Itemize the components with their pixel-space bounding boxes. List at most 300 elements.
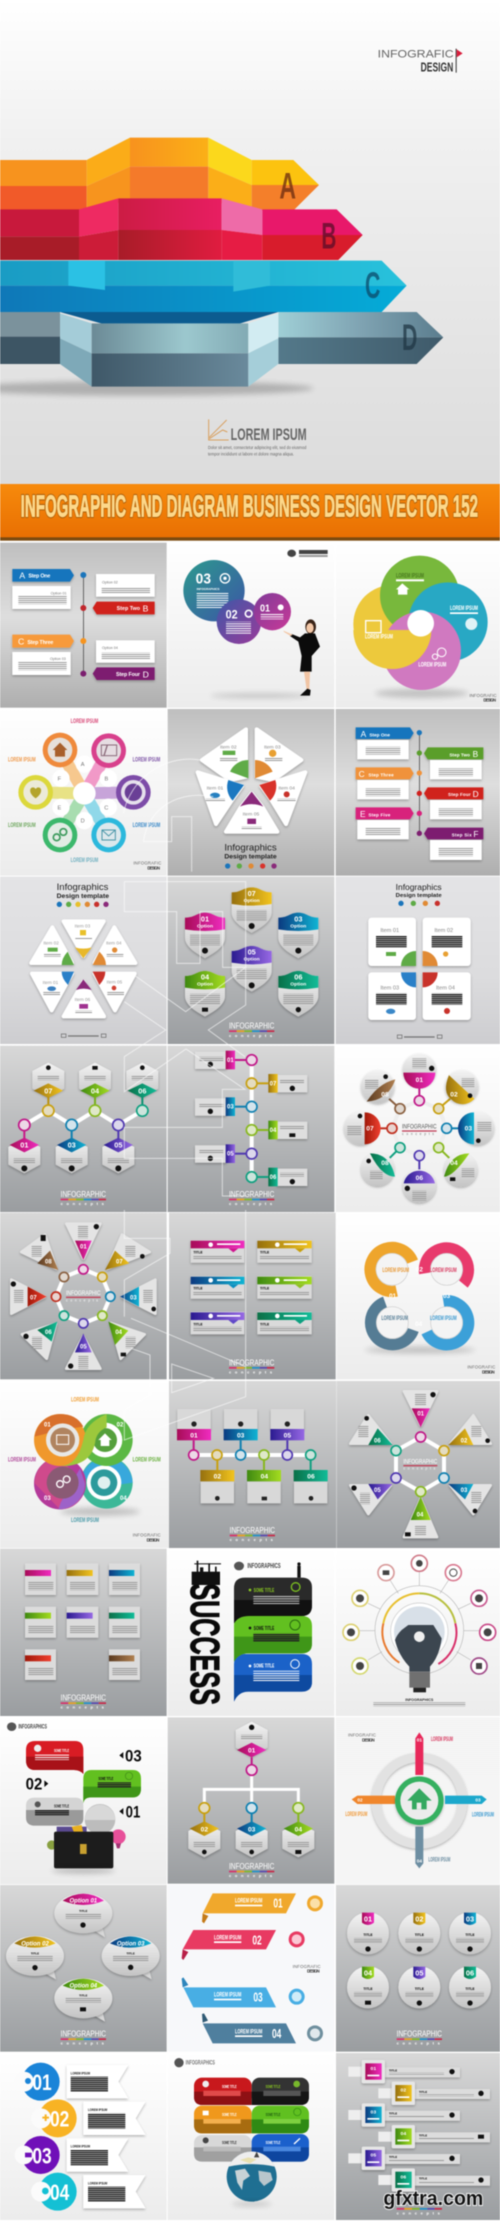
shield 07: Option [244, 898, 260, 904]
grey bubble [26, 1798, 83, 1826]
panel: org chart hexagons [168, 1717, 334, 1884]
infographic concepts mark [230, 1525, 276, 1542]
infographic concepts mark [229, 1357, 276, 1374]
blue bubble [252, 2134, 309, 2162]
top arrow [415, 1732, 423, 1775]
labels: LOREM IPSUM [71, 1517, 99, 1524]
item 04: Item 04 [278, 786, 295, 792]
shield 05: 05 [248, 948, 256, 957]
card 05 [67, 1607, 98, 1638]
left arrow [352, 1796, 395, 1804]
shield 07 [232, 887, 272, 933]
tab 03: 03 [227, 1105, 234, 1111]
circle 03 [34, 1457, 86, 1509]
infographic concepts mark: INFOGRAPHIC [61, 1693, 106, 1703]
bubble 03: Option 03 [117, 1941, 145, 1947]
bubble 03 [183, 560, 245, 621]
tip numbers: 04 [417, 1513, 424, 1519]
row 04: TITLE [419, 2133, 427, 2137]
circle 07 [344, 1112, 397, 1145]
badge 05 [398, 1966, 440, 2008]
circle 04: 04 [450, 1160, 458, 1167]
panel: hero arrows [0, 0, 500, 484]
row 03: 03 [32, 2143, 52, 2168]
centre mark: INFOGRAPHIC [66, 1290, 101, 1297]
infographic concepts mark: concepts [61, 2041, 107, 2046]
row 03 [348, 2103, 460, 2127]
badge 03 [449, 1912, 491, 1954]
badge 02 [398, 1912, 440, 1954]
row 06: 06 [401, 2174, 406, 2180]
panel: six header cards [169, 1213, 336, 1379]
ribbon 01 [202, 1893, 323, 1923]
tab 06: 06 [270, 1175, 277, 1181]
shield 01: Option [197, 923, 213, 929]
shield 06: Option [290, 982, 306, 988]
bubble 04: Option 04 [70, 1984, 98, 1990]
arrow C: C [365, 264, 380, 306]
item 02 left [31, 927, 74, 965]
infographic concepts mark: INFOGRAPHIC [230, 1525, 275, 1535]
bubble 04: TITLE [79, 1994, 87, 1998]
panel: zigzag hexagons [0, 1046, 167, 1212]
colour dots [225, 863, 277, 869]
panel: success ribbons [168, 1549, 334, 1716]
bubble 01: Option 01 [70, 1899, 97, 1905]
nodes [391, 1432, 449, 1497]
card 01: TITLE [193, 1251, 203, 1255]
row 04: LOREM IPSUM [88, 2180, 108, 2185]
tip numbers: 01 [417, 1411, 425, 1417]
lorem ipsum caption: tempor incididunt ut labore et dolore magna aliqua. [208, 452, 294, 458]
bottom arrow [415, 1827, 423, 1868]
badge 04 [347, 1966, 389, 2008]
card 06: TITLE [260, 1322, 270, 1326]
tip labels: 04 [115, 1330, 123, 1336]
infographic concepts mark: INFOGRAPHIC [229, 1861, 274, 1871]
node 06 [126, 1063, 158, 1116]
item 02 left: Item 02 [43, 941, 59, 946]
arrow B [0, 198, 363, 260]
row 02 [31, 2099, 146, 2137]
logo: DESIGN [147, 865, 160, 870]
panel: six round badges [336, 1885, 500, 2052]
card 06 [257, 1312, 312, 1334]
tab 01: 01 [227, 1058, 234, 1064]
bubble 01 [54, 1893, 112, 1937]
item 03 [255, 729, 301, 780]
pink ring [424, 1248, 468, 1284]
step D [424, 787, 483, 819]
logo [133, 861, 161, 870]
heading [396, 882, 442, 899]
badge 01: TITLE [363, 1933, 373, 1937]
logo: INFOGRAFIC [293, 1964, 321, 1969]
person silhouette [297, 1562, 301, 1578]
letter dots [52, 755, 117, 829]
home hub [395, 1776, 444, 1825]
item 03 [368, 972, 416, 1020]
logo: INFOGRAPHICS [247, 1561, 281, 1570]
infographic concepts mark: INFOGRAPHIC [397, 2029, 442, 2039]
labels: LOREM IPSUM [71, 857, 99, 864]
shield 07: 07 [248, 889, 256, 898]
labels: LOREM IPSUM [133, 1457, 161, 1464]
row 02: 02 [50, 2107, 69, 2132]
shield 06 [278, 971, 318, 1017]
logo: INFOGRAFIC [348, 1733, 376, 1738]
item 03: Item 03 [264, 745, 281, 751]
colour dots [398, 901, 440, 906]
item 01: Item 01 [207, 786, 224, 792]
panel: six step timeline [336, 709, 500, 876]
blue ring [427, 1301, 469, 1345]
tip labels: 07 [116, 1259, 123, 1265]
circle 02: 02 [450, 1092, 458, 1099]
icon: gears [43, 818, 77, 852]
centre hole [407, 610, 434, 637]
step F: Step Six [452, 833, 472, 838]
black bubble: SOME TITLE [266, 2084, 280, 2089]
card 01 [177, 1409, 211, 1460]
circle 04: 04 [120, 1496, 127, 1502]
bubble 02 [217, 599, 261, 644]
ribbon 04 [202, 2013, 323, 2043]
bubble 01 [254, 593, 291, 630]
tip numbers: 05 [374, 1488, 381, 1494]
ribbon 03: LOREM IPSUM [214, 1992, 242, 1999]
ring numbers: 04 [415, 1321, 423, 1328]
item 02 [202, 729, 248, 780]
bubble 04 [54, 1978, 112, 2022]
tip labels: 06 [45, 1330, 52, 1336]
circle 06 [361, 1143, 405, 1186]
badge 06: TITLE [465, 1987, 475, 1991]
logo [133, 1533, 161, 1542]
badge 04: 04 [364, 1968, 373, 1977]
row 02 [378, 2082, 490, 2105]
infographic concepts mark: INFOGRAPHIC [229, 1021, 274, 1031]
logo [7, 1722, 47, 1731]
step F: F [473, 829, 478, 839]
icon: globe [116, 775, 151, 810]
ribbon 04: LOREM IPSUM [235, 2028, 263, 2035]
circle 02 [81, 1414, 133, 1466]
item 05 [226, 792, 277, 832]
card 01 [25, 1563, 56, 1595]
card 03 [224, 1409, 258, 1460]
bubble 03 [102, 1936, 160, 1979]
panel: S curve circles [0, 1381, 169, 1548]
icon: home [43, 733, 77, 767]
circle 01 [34, 1414, 107, 1466]
card 04: TITLE [260, 1287, 270, 1291]
row 05: TITLE [389, 2155, 397, 2159]
heading: Infographics [396, 882, 442, 892]
petal arms [36, 750, 133, 835]
ribbon 03: 03 [253, 1990, 263, 2004]
centre mark: INFOGRAPHIC [403, 1458, 437, 1465]
infographic concepts mark: INFOGRAPHIC [229, 1189, 274, 1199]
green bubble [252, 2106, 309, 2133]
lorem ipsum caption: LOREM IPSUM [231, 425, 307, 444]
item 01 left lower: Item 01 [43, 980, 59, 985]
concepts mark [397, 2208, 443, 2215]
ribbon 02: 02 [252, 1933, 262, 1947]
ground shadow [0, 381, 313, 396]
caption [373, 1698, 465, 1706]
steel ring [371, 1302, 413, 1345]
logo: INFOGRAPHICS [18, 1724, 47, 1730]
row 03: 03 [371, 2109, 376, 2115]
infographic concepts mark: concepts [229, 1369, 276, 1374]
inner circles [376, 1253, 463, 1339]
step F [424, 828, 483, 860]
panel: staggered timeline bars [336, 2053, 500, 2220]
panel: speech bubbles with bag [0, 1717, 167, 1884]
step B [424, 747, 483, 779]
logo: DESIGN [482, 1369, 495, 1374]
tip labels: 08 [45, 1259, 52, 1265]
number labels: 01 [126, 1802, 140, 1821]
infographic concepts mark: concepts [229, 1201, 276, 1206]
badge 01 [347, 1912, 389, 1954]
top hex [236, 1722, 268, 1775]
panel: hexagon triangles [0, 877, 167, 1044]
tab 07: 07 [270, 1081, 277, 1087]
card 05 [270, 1409, 304, 1460]
triangles [11, 1224, 155, 1369]
red bubble: SOME TITLE [54, 1748, 69, 1753]
logo: INFOGRAPHICS [186, 2060, 215, 2066]
step one: Step One [28, 574, 50, 580]
step two: Option 02 [102, 580, 118, 584]
caption: INFOGRAPHICS [405, 1698, 434, 1702]
item 03: Item 03 [380, 985, 399, 991]
item 01: Item 01 [380, 928, 399, 934]
step four [93, 640, 155, 680]
ring numbers [389, 1266, 451, 1328]
disc labels: LOREM IPSUM [396, 572, 424, 579]
icon: monitor [91, 733, 126, 768]
yellow disc [353, 585, 431, 663]
circle 08 [361, 1070, 405, 1114]
circle 01: 01 [44, 1423, 51, 1429]
top arrow: 01 [417, 1738, 422, 1743]
panel: pinwheel discs [336, 543, 500, 708]
logo [174, 2058, 215, 2067]
step three: C [18, 636, 24, 646]
infographic concepts mark: concepts [229, 1873, 276, 1878]
badge 03: TITLE [465, 1933, 475, 1937]
shield 03 [278, 913, 318, 958]
number labels: 03 [125, 1746, 142, 1765]
heading: Design template [57, 893, 110, 900]
shield 04 [185, 971, 225, 1017]
step B: Step Two [449, 753, 470, 758]
letters: A [81, 762, 85, 768]
circle 07: 07 [366, 1126, 374, 1133]
step three [12, 635, 74, 675]
row 01: 01 [32, 2070, 52, 2095]
top hex: 01 [248, 1748, 256, 1755]
heading: Design template [224, 854, 277, 861]
labels [8, 718, 161, 864]
row 02: 02 [401, 2088, 406, 2094]
hex 04 [282, 1803, 314, 1857]
row 02: TITLE [419, 2090, 427, 2094]
footer note [397, 1035, 442, 1038]
step C [356, 767, 414, 799]
heading [224, 842, 277, 861]
tip numbers: 06 [374, 1439, 381, 1445]
card 05: TITLE [193, 1322, 203, 1326]
outer ring [376, 1757, 463, 1844]
tip numbers [374, 1411, 468, 1519]
infographic concepts mark: INFOGRAPHIC [229, 1357, 274, 1367]
step D: D [473, 789, 479, 799]
footer note [61, 1034, 106, 1037]
step A: Step One [369, 732, 390, 737]
heading [57, 882, 110, 900]
card 02: TITLE [260, 1251, 270, 1255]
ribbon 01: LOREM IPSUM [235, 1898, 263, 1905]
hex 02 [188, 1803, 220, 1857]
infographic concepts mark: concepts [229, 1033, 276, 1038]
green disc [380, 556, 459, 635]
orange bubble [194, 2106, 252, 2133]
infographic concepts mark: concepts [230, 1537, 276, 1542]
green bubble: SOME TITLE [98, 1776, 113, 1781]
item 04 right: Item 04 [106, 941, 122, 946]
green bubble [83, 1770, 141, 1804]
step four: Step Four [116, 672, 140, 678]
card 04 [257, 1276, 312, 1299]
ring numbers: 03 [443, 1293, 451, 1300]
labels: LOREM IPSUM [8, 1457, 36, 1464]
card 01: 01 [190, 1433, 198, 1440]
infographic concepts mark [229, 1021, 276, 1038]
left arrow: 02 [357, 1798, 363, 1803]
circle 02 [434, 1070, 478, 1114]
step C: C [359, 769, 365, 779]
badge 04: TITLE [363, 1987, 373, 1991]
step four: D [143, 669, 149, 679]
circle 02: 02 [117, 1423, 124, 1429]
blue bubble: SOME TITLE [266, 2140, 280, 2145]
bubble 02 [6, 1936, 64, 1979]
hex 04: 04 [295, 1826, 302, 1833]
tip numbers: 03 [461, 1488, 468, 1494]
badge 05: TITLE [415, 1987, 425, 1991]
node 05 [102, 1119, 134, 1173]
circle 04 [81, 1457, 133, 1509]
card 02: 02 [214, 1473, 221, 1480]
ribbon 04: 04 [272, 2027, 281, 2041]
row 05: 05 [371, 2153, 376, 2159]
step four: Option 04 [102, 646, 118, 650]
ring numbers: 02 [416, 1266, 423, 1273]
panel: lightbulb hub [336, 1549, 500, 1716]
toolbag with helmet and balloon [47, 1804, 126, 1873]
node 06: 06 [138, 1086, 146, 1095]
infographic concepts mark [229, 1861, 276, 1878]
grey bubble: SOME TITLE [222, 2140, 237, 2145]
shield 03: Option [290, 923, 306, 929]
badge 01: 01 [364, 1914, 372, 1923]
badge 02: TITLE [415, 1933, 425, 1937]
right arrow [445, 1796, 487, 1804]
bubble 02: Option 02 [21, 1941, 49, 1947]
bubble 02: TITLE [31, 1952, 39, 1956]
row 06 [378, 2168, 490, 2192]
arrow A [0, 138, 319, 211]
ring labels: LOREM IPSUM [430, 1315, 457, 1322]
logo: infografic design [378, 49, 463, 75]
circle 03: 03 [44, 1496, 51, 1502]
colour arc [382, 1593, 456, 1664]
panel: option speech bubbles [0, 1885, 167, 2052]
node 03: 03 [68, 1141, 76, 1150]
labels: LOREM IPSUM [431, 1737, 453, 1743]
satellite icons [343, 1555, 496, 1674]
labels: LOREM IPSUM [428, 1858, 450, 1864]
card 06 [294, 1450, 328, 1503]
heading: Infographics [57, 882, 109, 892]
card 04 [247, 1450, 281, 1503]
centre mark [403, 1458, 438, 1471]
ring shadow [365, 1347, 475, 1353]
item 01 left lower [32, 972, 74, 1010]
letters: D [81, 819, 85, 825]
black bubble [252, 2078, 309, 2105]
circle 03: 03 [465, 1126, 472, 1133]
disc labels [365, 572, 478, 669]
connectors [377, 1087, 462, 1172]
coloured tips [368, 1408, 473, 1520]
node 07: 07 [44, 1086, 52, 1095]
panel: hexagon triangle ring [337, 1381, 500, 1548]
heading: Design template [396, 893, 442, 899]
letters: E [57, 805, 61, 811]
tab 05 [195, 1144, 257, 1163]
yellow overlap [353, 630, 431, 669]
infographic concepts mark: concepts [61, 1201, 107, 1206]
row 03: LOREM IPSUM [71, 2144, 90, 2149]
red bubble: SOME TITLE [222, 2084, 237, 2089]
letters: C [104, 805, 108, 811]
card 07 [25, 1649, 56, 1680]
infographic concepts mark: concepts [397, 2041, 443, 2046]
logo [469, 693, 497, 703]
ring labels: LOREM IPSUM [382, 1267, 409, 1274]
panel: eight circle ring [336, 1046, 500, 1212]
text blocks and icons [351, 1392, 490, 1536]
item 05 right lower [93, 972, 135, 1010]
shield 05: Option [244, 957, 260, 963]
number labels: 02 [26, 1774, 42, 1793]
tip labels: 01 [80, 1244, 87, 1250]
logo: INFOGRAFIC [469, 693, 497, 698]
labels: LOREM IPSUM [345, 1812, 367, 1818]
row 01: LOREM IPSUM [71, 2070, 90, 2075]
step one: A [19, 571, 25, 581]
row 02: LOREM IPSUM [88, 2107, 108, 2112]
card 06 [109, 1607, 140, 1638]
coloured tips [28, 1241, 139, 1352]
labels: LOREM IPSUM [133, 757, 161, 764]
logo: DESIGN [307, 1969, 320, 1974]
